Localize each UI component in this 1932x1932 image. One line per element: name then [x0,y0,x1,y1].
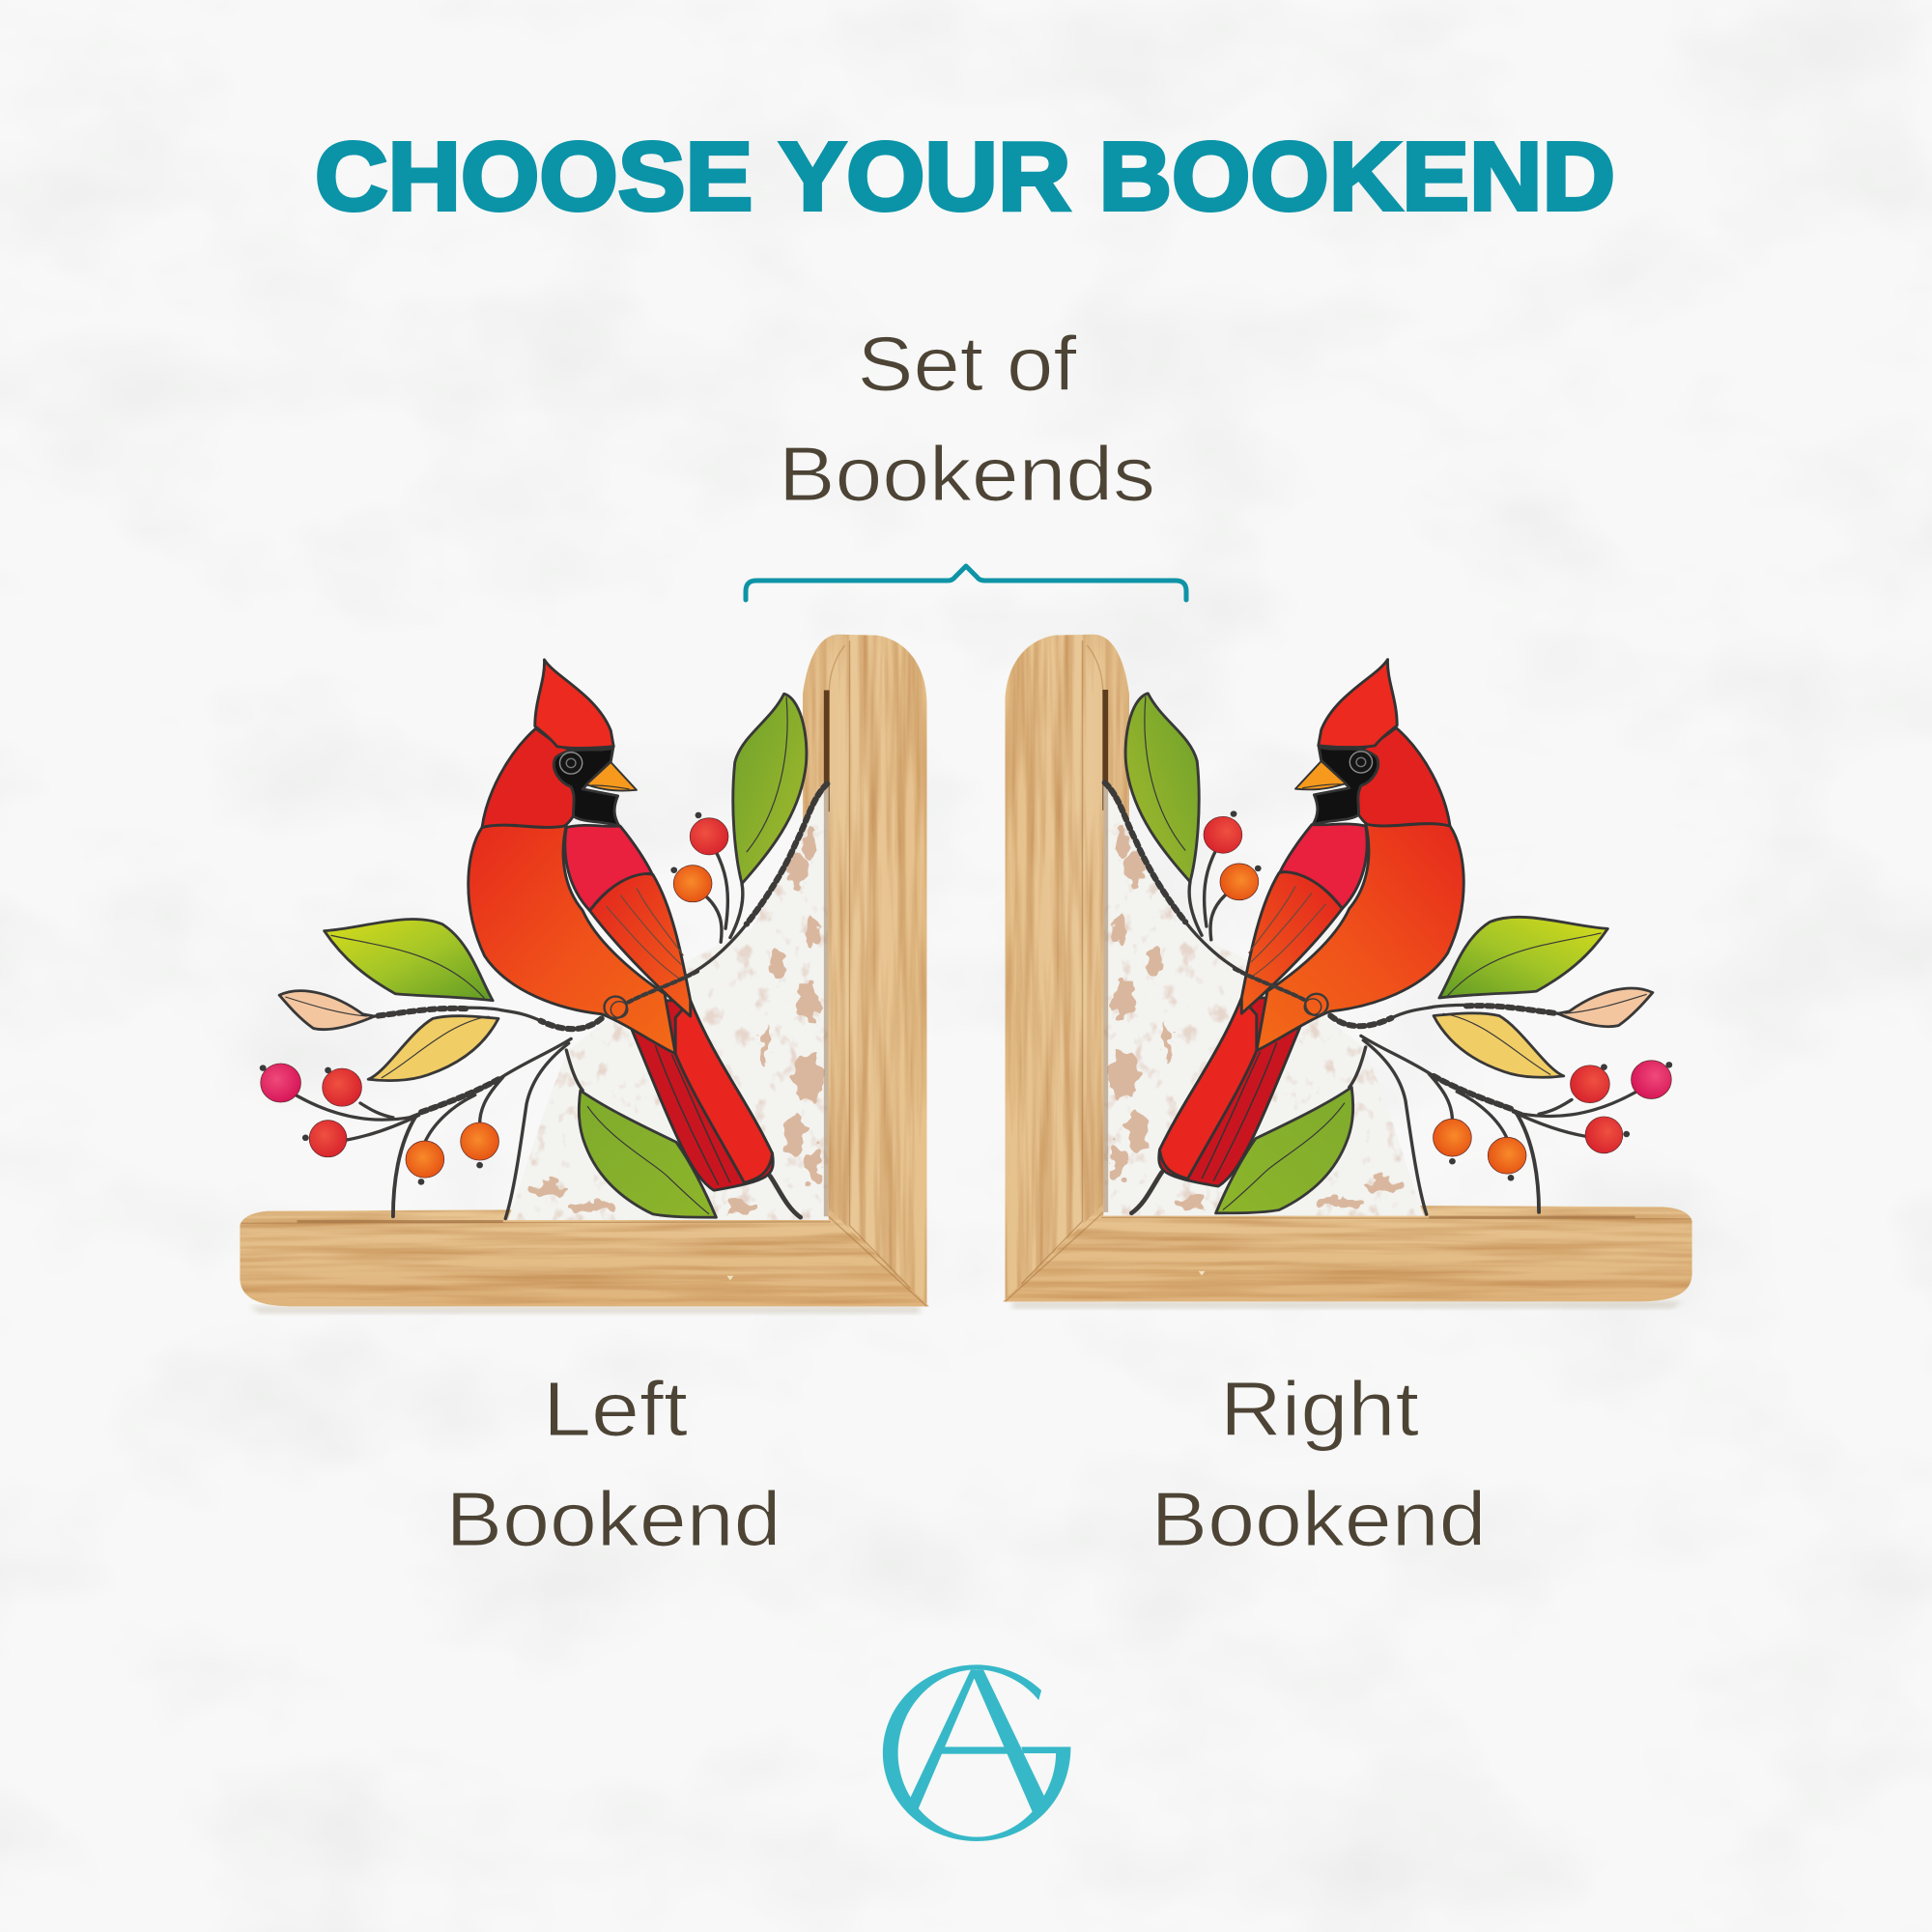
label: right bookend [1151,1366,1486,1562]
crest [535,660,613,748]
label: right bookend: Right [1220,1366,1419,1452]
logo: AG monogram [883,1664,1070,1841]
breast [469,825,675,1054]
peach leaf [279,991,375,1030]
title: CHOOSE YOUR BOOKEND [315,123,1615,231]
label: left bookend [446,1366,781,1562]
head [482,728,578,828]
lower leaf [579,1091,716,1217]
left bookend [240,635,929,1313]
right bookend [1003,635,1692,1308]
leaves [279,694,807,1217]
chest [565,825,652,911]
wing [589,874,691,1016]
tail [632,1001,773,1190]
textured glass panel [508,784,829,1220]
label: right bookend: Bookend [1151,1476,1486,1562]
label: set of bookends: Set of [858,321,1077,407]
label: set of bookends: Bookends [779,431,1155,517]
shadow [250,1306,920,1313]
yellow leaf [368,1016,498,1081]
large left leaf [325,919,493,1001]
bracket [746,566,1186,600]
branch over bird with wire coil [605,971,697,1018]
label: set of bookends [779,321,1155,517]
upper right leaf [733,694,807,884]
branches [298,783,827,1219]
wooden stand [240,635,929,1306]
berries [260,812,728,1185]
face mask [554,748,619,826]
eye [559,753,582,774]
label: left bookend: Left [543,1366,688,1452]
cardinal bird [469,660,773,1190]
beak [586,762,637,791]
label: left bookend: Bookend [446,1476,781,1562]
